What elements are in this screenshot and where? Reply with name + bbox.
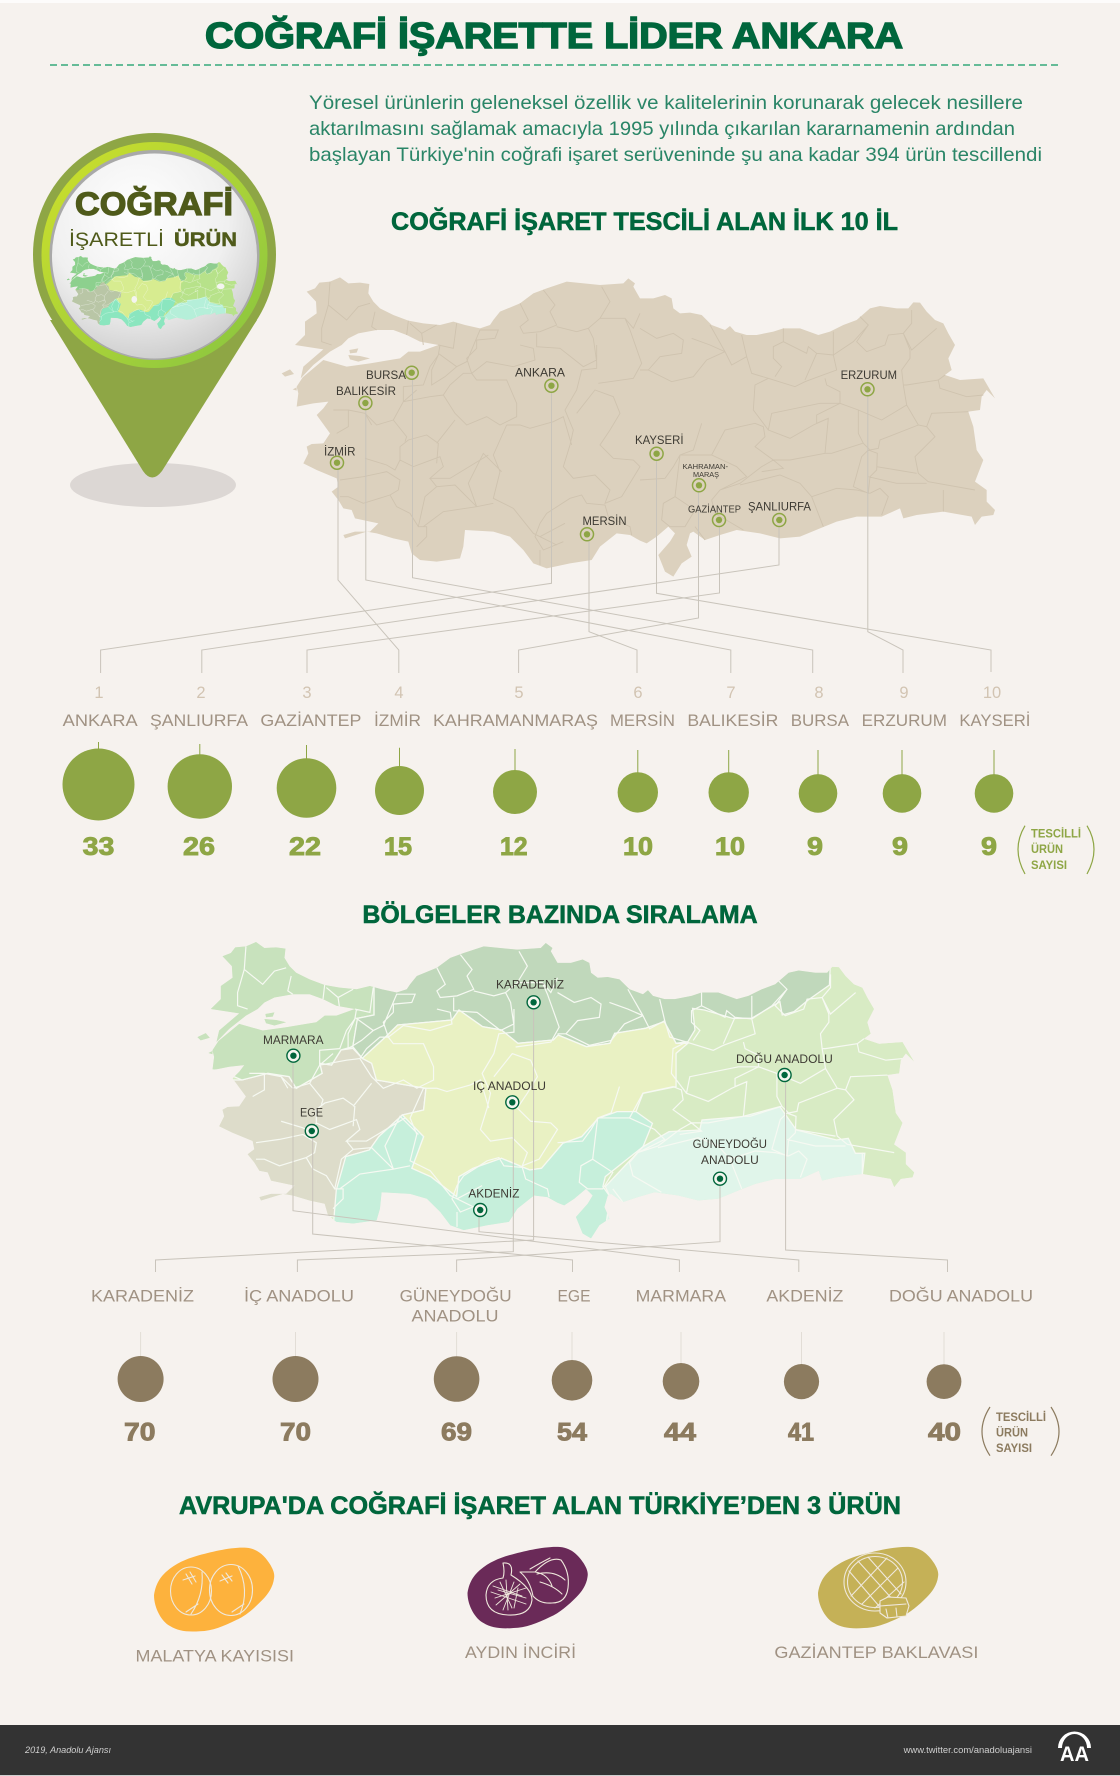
- province counts: 9: [807, 833, 823, 861]
- province names: ŞANLIURFA: [150, 711, 249, 730]
- legend: registered product count (green): SAYISI: [1031, 858, 1067, 872]
- province names: KAYSERİ: [959, 711, 1030, 730]
- region counts: 40: [928, 1419, 961, 1447]
- province counts: 26: [183, 833, 215, 861]
- region names: İÇ ANADOLU: [244, 1286, 354, 1305]
- region map markers: [287, 996, 791, 1216]
- intro text: Yöresel ürünlerin geleneksel özellik ve kalitelerinin korunarak gelecek nesillere: [309, 92, 1023, 114]
- region map labels: GÜNEYDOĞU: [693, 1138, 767, 1151]
- legend: registered product count (brown): [982, 1407, 1059, 1456]
- province counts: 33: [83, 833, 114, 861]
- legend: registered product count (brown): TESCİLLİ: [996, 1409, 1046, 1424]
- icon: apricot: [154, 1548, 274, 1632]
- province names: İZMİR: [374, 711, 421, 730]
- bubble chart: provinces: [62, 742, 1013, 820]
- heading: European registered products: AVRUPA'DA COĞRAFİ İŞARET ALAN TÜRKİYE’DEN 3 ÜRÜN: [179, 1491, 901, 1520]
- product names: [136, 1643, 978, 1666]
- province counts: 10: [715, 833, 745, 861]
- province counts: 12: [500, 833, 528, 861]
- icon: location pin with badge: İŞARETLİ: [69, 228, 164, 251]
- icon: location pin with badge: [33, 133, 276, 507]
- icon: baklava: [818, 1547, 938, 1628]
- province names: BURSA: [791, 711, 850, 730]
- rank numbers: 3: [302, 684, 312, 702]
- region counts: 69: [441, 1419, 472, 1447]
- footer bar: AA: [1060, 1743, 1089, 1766]
- province counts: 22: [289, 833, 321, 861]
- rank numbers: 7: [726, 684, 736, 702]
- province counts: 15: [384, 833, 412, 861]
- heading: regions: BÖLGELER BAZINDA SIRALAMA: [362, 901, 758, 929]
- province counts: 9: [892, 833, 908, 861]
- legend: registered product count (green): [1018, 825, 1094, 874]
- footer bar: www.twitter.com/anadoluajansi: [903, 1745, 1032, 1755]
- region names: MARMARA: [636, 1286, 727, 1305]
- region names: DOĞU ANADOLU: [889, 1286, 1033, 1305]
- footer bar: 2019, Anadolu Ajansı: [24, 1745, 111, 1755]
- intro text: aktarılmasını sağlamak amacıyla 1995 yılında çıkarılan kararnamenin ardından: [309, 118, 1015, 140]
- region names: KARADENİZ: [91, 1286, 194, 1305]
- province map labels: GAZİANTEP: [688, 503, 741, 516]
- province map labels: ERZURUM: [841, 370, 897, 382]
- bubble chart: regions: [118, 1332, 961, 1402]
- product names: MALATYA KAYISISI: [136, 1647, 294, 1666]
- region counts: 41: [788, 1419, 814, 1447]
- rank numbers: 10: [983, 684, 1001, 702]
- region counts: 70: [124, 1419, 156, 1447]
- region names: EGE: [558, 1286, 590, 1305]
- product names: AYDIN İNCİRİ: [465, 1643, 576, 1662]
- province map labels: BALIKESİR: [336, 385, 396, 398]
- rank numbers: 4: [394, 684, 404, 702]
- rank numbers: 1: [94, 684, 104, 702]
- icon: location pin with badge: ÜRÜN: [174, 228, 237, 251]
- region map labels: MARMARA: [263, 1035, 324, 1047]
- legend: registered product count (green): ÜRÜN: [1031, 841, 1063, 856]
- province map labels: ANKARA: [515, 368, 565, 380]
- title: COĞRAFİ İŞARETTE LİDER ANKARA: [205, 16, 903, 56]
- province names: [63, 711, 1030, 730]
- icon: location pin with badge: COĞRAFİ: [75, 186, 233, 222]
- heading: top 10 provinces: COĞRAFİ İŞARET TESCİLİ ALAN İLK 10 İL: [391, 207, 898, 236]
- region counts: 44: [664, 1419, 696, 1447]
- province names: ERZURUM: [862, 711, 947, 730]
- region counts: 70: [280, 1419, 311, 1447]
- region map labels: [263, 979, 833, 1201]
- province names: KAHRAMANMARAŞ: [433, 711, 598, 730]
- rank numbers: 8: [814, 684, 824, 702]
- region names: AKDENİZ: [766, 1286, 843, 1305]
- legend: registered product count (brown): SAYISI: [996, 1441, 1032, 1455]
- region map labels: AKDENİZ: [468, 1188, 519, 1201]
- region map labels: ANADOLU: [701, 1155, 759, 1167]
- region map labels: DOĞU ANADOLU: [736, 1053, 833, 1066]
- region map labels: IÇ ANADOLU: [473, 1081, 546, 1093]
- region map labels: KARADENİZ: [496, 979, 564, 992]
- province names: ANKARA: [63, 711, 138, 730]
- province map labels: BURSA: [366, 370, 406, 382]
- footer bar: [0, 1725, 1120, 1776]
- icon: fig: [468, 1547, 588, 1628]
- province map labels: İZMİR: [324, 446, 356, 459]
- rank numbers: 2: [196, 684, 206, 702]
- region names: ANADOLU: [412, 1307, 498, 1326]
- legend: registered product count (brown): ÜRÜN: [996, 1425, 1028, 1440]
- leader lines: provinces to ranks: [101, 380, 991, 673]
- province map labels: MARAŞ: [693, 470, 719, 479]
- province map labels: KAHRAMAN-: [682, 462, 728, 471]
- province names: BALIKESİR: [687, 711, 778, 730]
- map: regions: [190, 930, 914, 1250]
- rank numbers: 5: [514, 684, 524, 702]
- province counts: [83, 833, 997, 861]
- province map labels: [324, 368, 897, 528]
- province map markers: [330, 366, 874, 541]
- region counts: 54: [557, 1419, 587, 1447]
- region map labels: EGE: [300, 1108, 323, 1120]
- province counts: 9: [981, 833, 997, 861]
- intro text: başlayan Türkiye'nin coğrafi işaret serüveninde şu ana kadar 394 ürün tescillendi: [309, 144, 1042, 166]
- province map labels: ŞANLIURFA: [748, 502, 811, 514]
- intro text: [309, 92, 1042, 166]
- product names: GAZİANTEP BAKLAVASI: [774, 1643, 978, 1662]
- region counts: [124, 1419, 961, 1447]
- province map labels: KAYSERİ: [635, 434, 684, 447]
- leader lines: regions to names: [156, 1009, 948, 1272]
- province map labels: MERSİN: [582, 515, 626, 528]
- province names: MERSİN: [610, 711, 675, 730]
- province counts: 10: [623, 833, 653, 861]
- map: top 10 provinces: [282, 277, 995, 577]
- region names: GÜNEYDOĞU: [400, 1286, 512, 1305]
- rank numbers: 6: [633, 684, 643, 702]
- province names: GAZİANTEP: [260, 711, 361, 730]
- rank numbers: 9: [899, 684, 909, 702]
- rank numbers: [94, 684, 1001, 702]
- region names: [91, 1286, 1033, 1326]
- legend: registered product count (green): TESCİLLİ: [1031, 825, 1081, 840]
